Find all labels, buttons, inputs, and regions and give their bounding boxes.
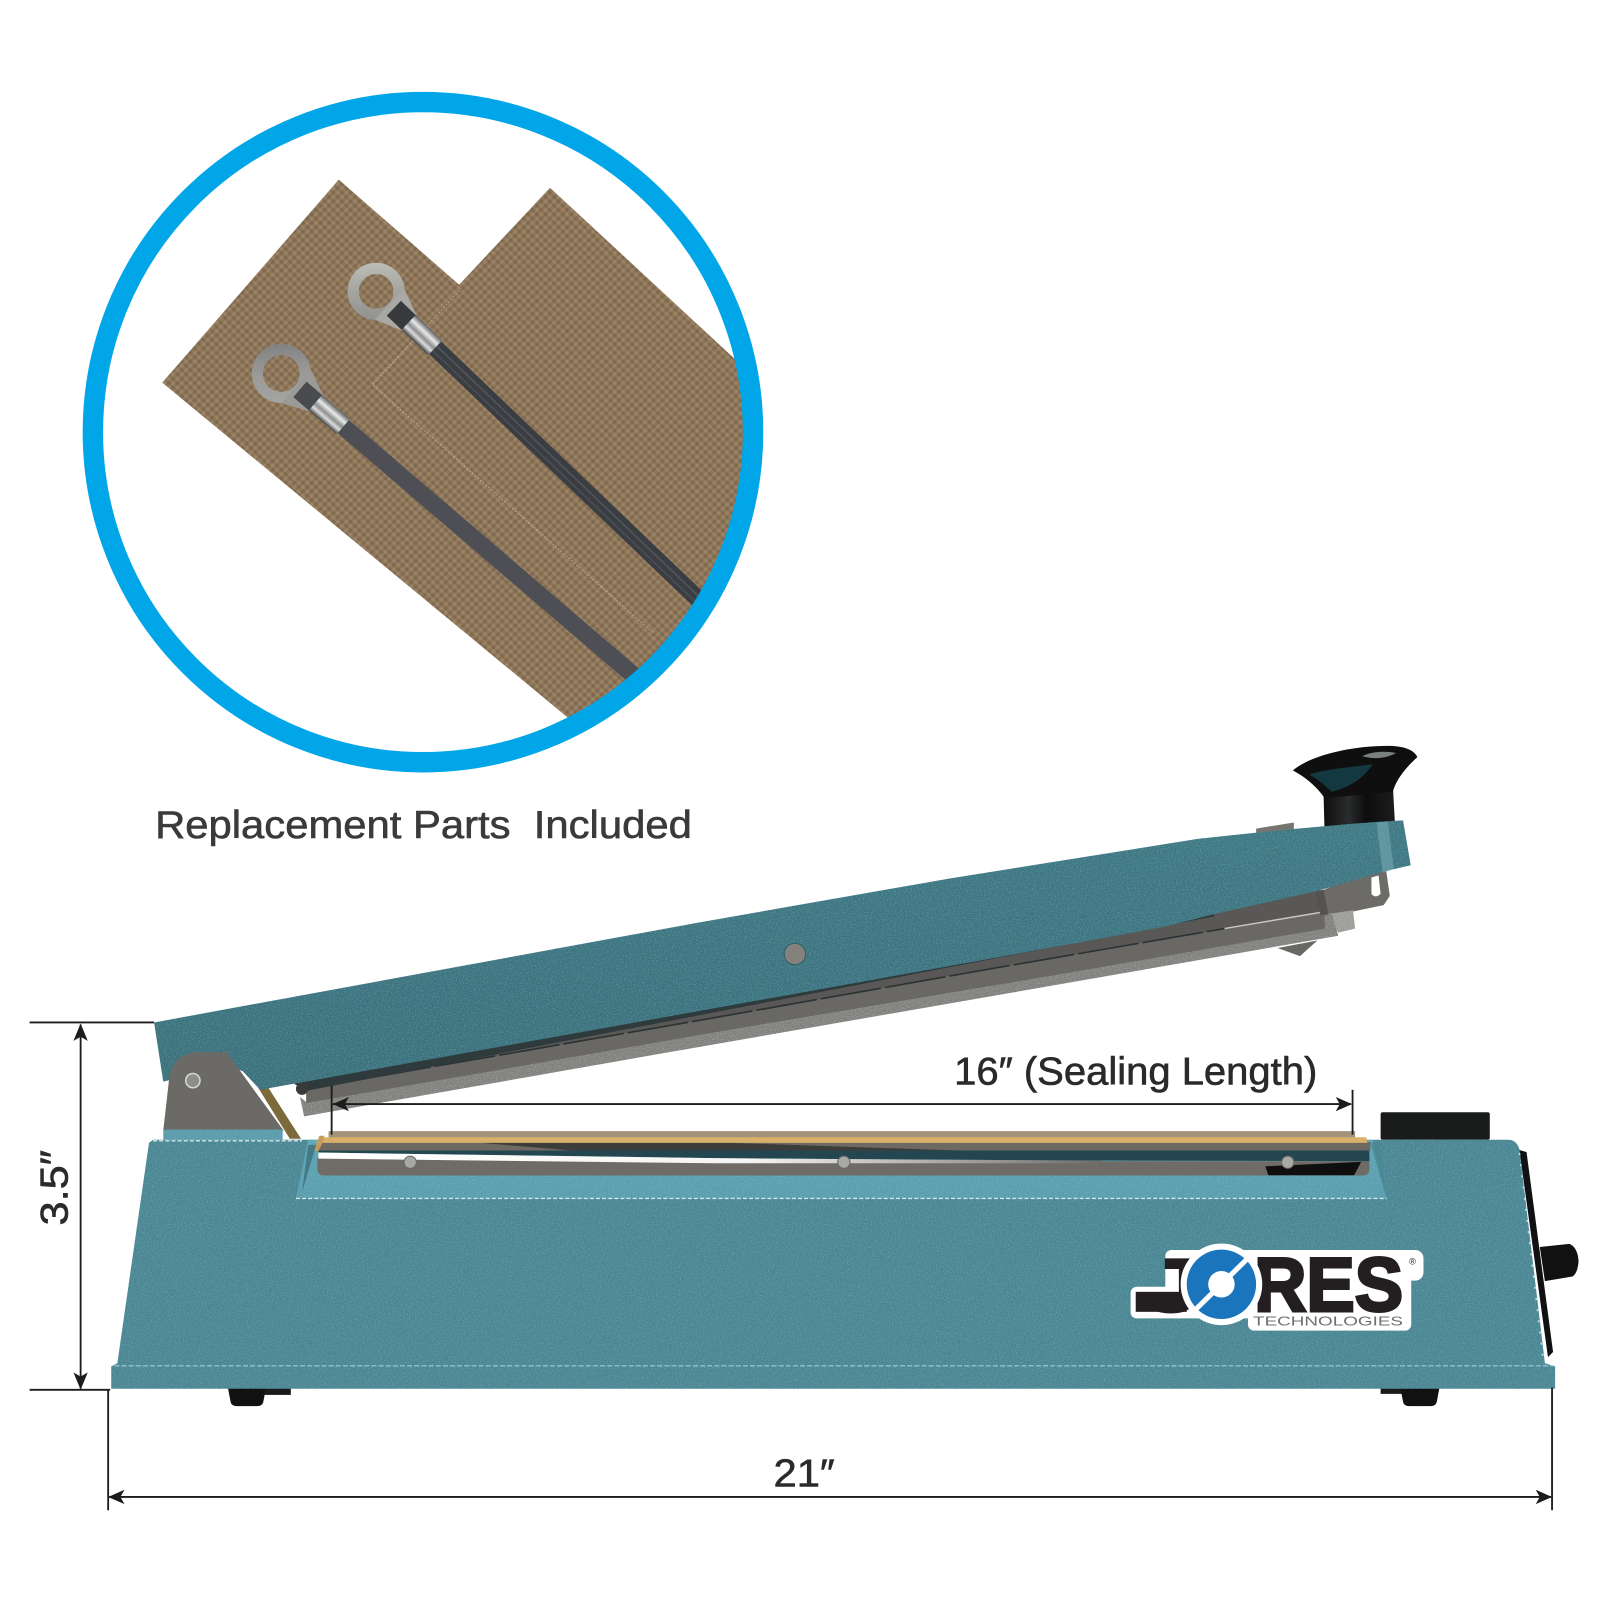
- rail top edge: [329, 1131, 1355, 1139]
- screw right: [1282, 1156, 1294, 1168]
- upper jaw speckled block: [1327, 910, 1355, 933]
- logo letter J: J: [1145, 1244, 1202, 1329]
- base right highlight: [1519, 1153, 1543, 1357]
- upper jaw speckled strip: [300, 911, 1338, 1116]
- dimension: width: [108, 1388, 1552, 1510]
- blue circle ring: [93, 102, 753, 762]
- teflon fabric tape: [162, 180, 743, 718]
- jaw fixing: [296, 1083, 308, 1095]
- recess face: [296, 1140, 1387, 1198]
- lower bar: [317, 1157, 1369, 1176]
- jaw end post: [1315, 890, 1329, 915]
- screw centre: [838, 1156, 850, 1168]
- jaw under-arm shadow: [294, 910, 1214, 1091]
- dark wedge on rail: [476, 1142, 959, 1151]
- sealer knob: [1293, 746, 1417, 829]
- label: height: 3.5″: [33, 1150, 76, 1226]
- upper jaw gray band: [306, 890, 1325, 1103]
- dimension: height: [30, 1022, 154, 1390]
- heat sealer machine: [111, 746, 1579, 1406]
- recess left shadow: [302, 1145, 316, 1192]
- point below upper jaw: [1278, 941, 1317, 956]
- grey under rail: [318, 1142, 1370, 1151]
- rear foot: [228, 1386, 291, 1406]
- registered mark: ®: [1409, 1256, 1416, 1266]
- dark teal band: [318, 1150, 1369, 1161]
- timer dial: [1540, 1244, 1579, 1281]
- logo J swoosh: [1136, 1292, 1187, 1312]
- logo white backing: [1131, 1250, 1423, 1331]
- base top highlight: [153, 1140, 302, 1142]
- side panel: [1519, 1150, 1553, 1357]
- lower heating element: [252, 344, 639, 680]
- flange highlight: [114, 1365, 1553, 1367]
- fabric and heating elements: [162, 180, 743, 718]
- caption: replacement parts: Replacement Parts Included: [155, 804, 692, 847]
- overlap seam: [372, 291, 653, 633]
- hinge screw: [186, 1073, 200, 1088]
- logo disc: [1181, 1243, 1262, 1325]
- rocker switch: [1381, 1112, 1490, 1140]
- panel: replacement parts circle: [93, 102, 786, 786]
- lower jaw assembly: [314, 1131, 1370, 1176]
- logo TECHNOLOGIES: TECHNOLOGIES: [1253, 1314, 1403, 1329]
- logo: Jores Technologies: [1131, 1243, 1423, 1331]
- front foot: [1381, 1386, 1440, 1406]
- arm end highlight: [1377, 821, 1394, 872]
- label: sealing length: 16″ (Sealing Length): [954, 1051, 1317, 1094]
- recess bottom highlight: [296, 1197, 1387, 1199]
- label: width: 21″: [773, 1453, 835, 1496]
- rear bracket tab: [1256, 822, 1294, 842]
- recess right shadow: [1370, 1143, 1386, 1196]
- brass strut: [258, 1088, 301, 1139]
- logo letters RES: RES: [1254, 1243, 1403, 1328]
- upper arm: [154, 820, 1411, 1090]
- arm pivot hole: [784, 943, 806, 965]
- hinge pin boss: [176, 1047, 208, 1080]
- cam: [1265, 1162, 1361, 1175]
- screw left: [404, 1156, 416, 1168]
- upper jaw top band: [306, 888, 1321, 1089]
- jaw seam highlight: [1224, 912, 1321, 929]
- white gap: [318, 1153, 1102, 1163]
- slotted bracket: [1321, 867, 1390, 917]
- hinge bracket: [163, 1052, 284, 1131]
- base body: [111, 1140, 1555, 1389]
- gold heat strip: [316, 1137, 1367, 1143]
- gold strip end: [314, 1136, 324, 1151]
- dimension: sealing length: [332, 1086, 1353, 1135]
- hinge plate: [163, 1130, 283, 1140]
- jaw dark seam: [306, 929, 1224, 1089]
- upper heating element: [348, 262, 701, 605]
